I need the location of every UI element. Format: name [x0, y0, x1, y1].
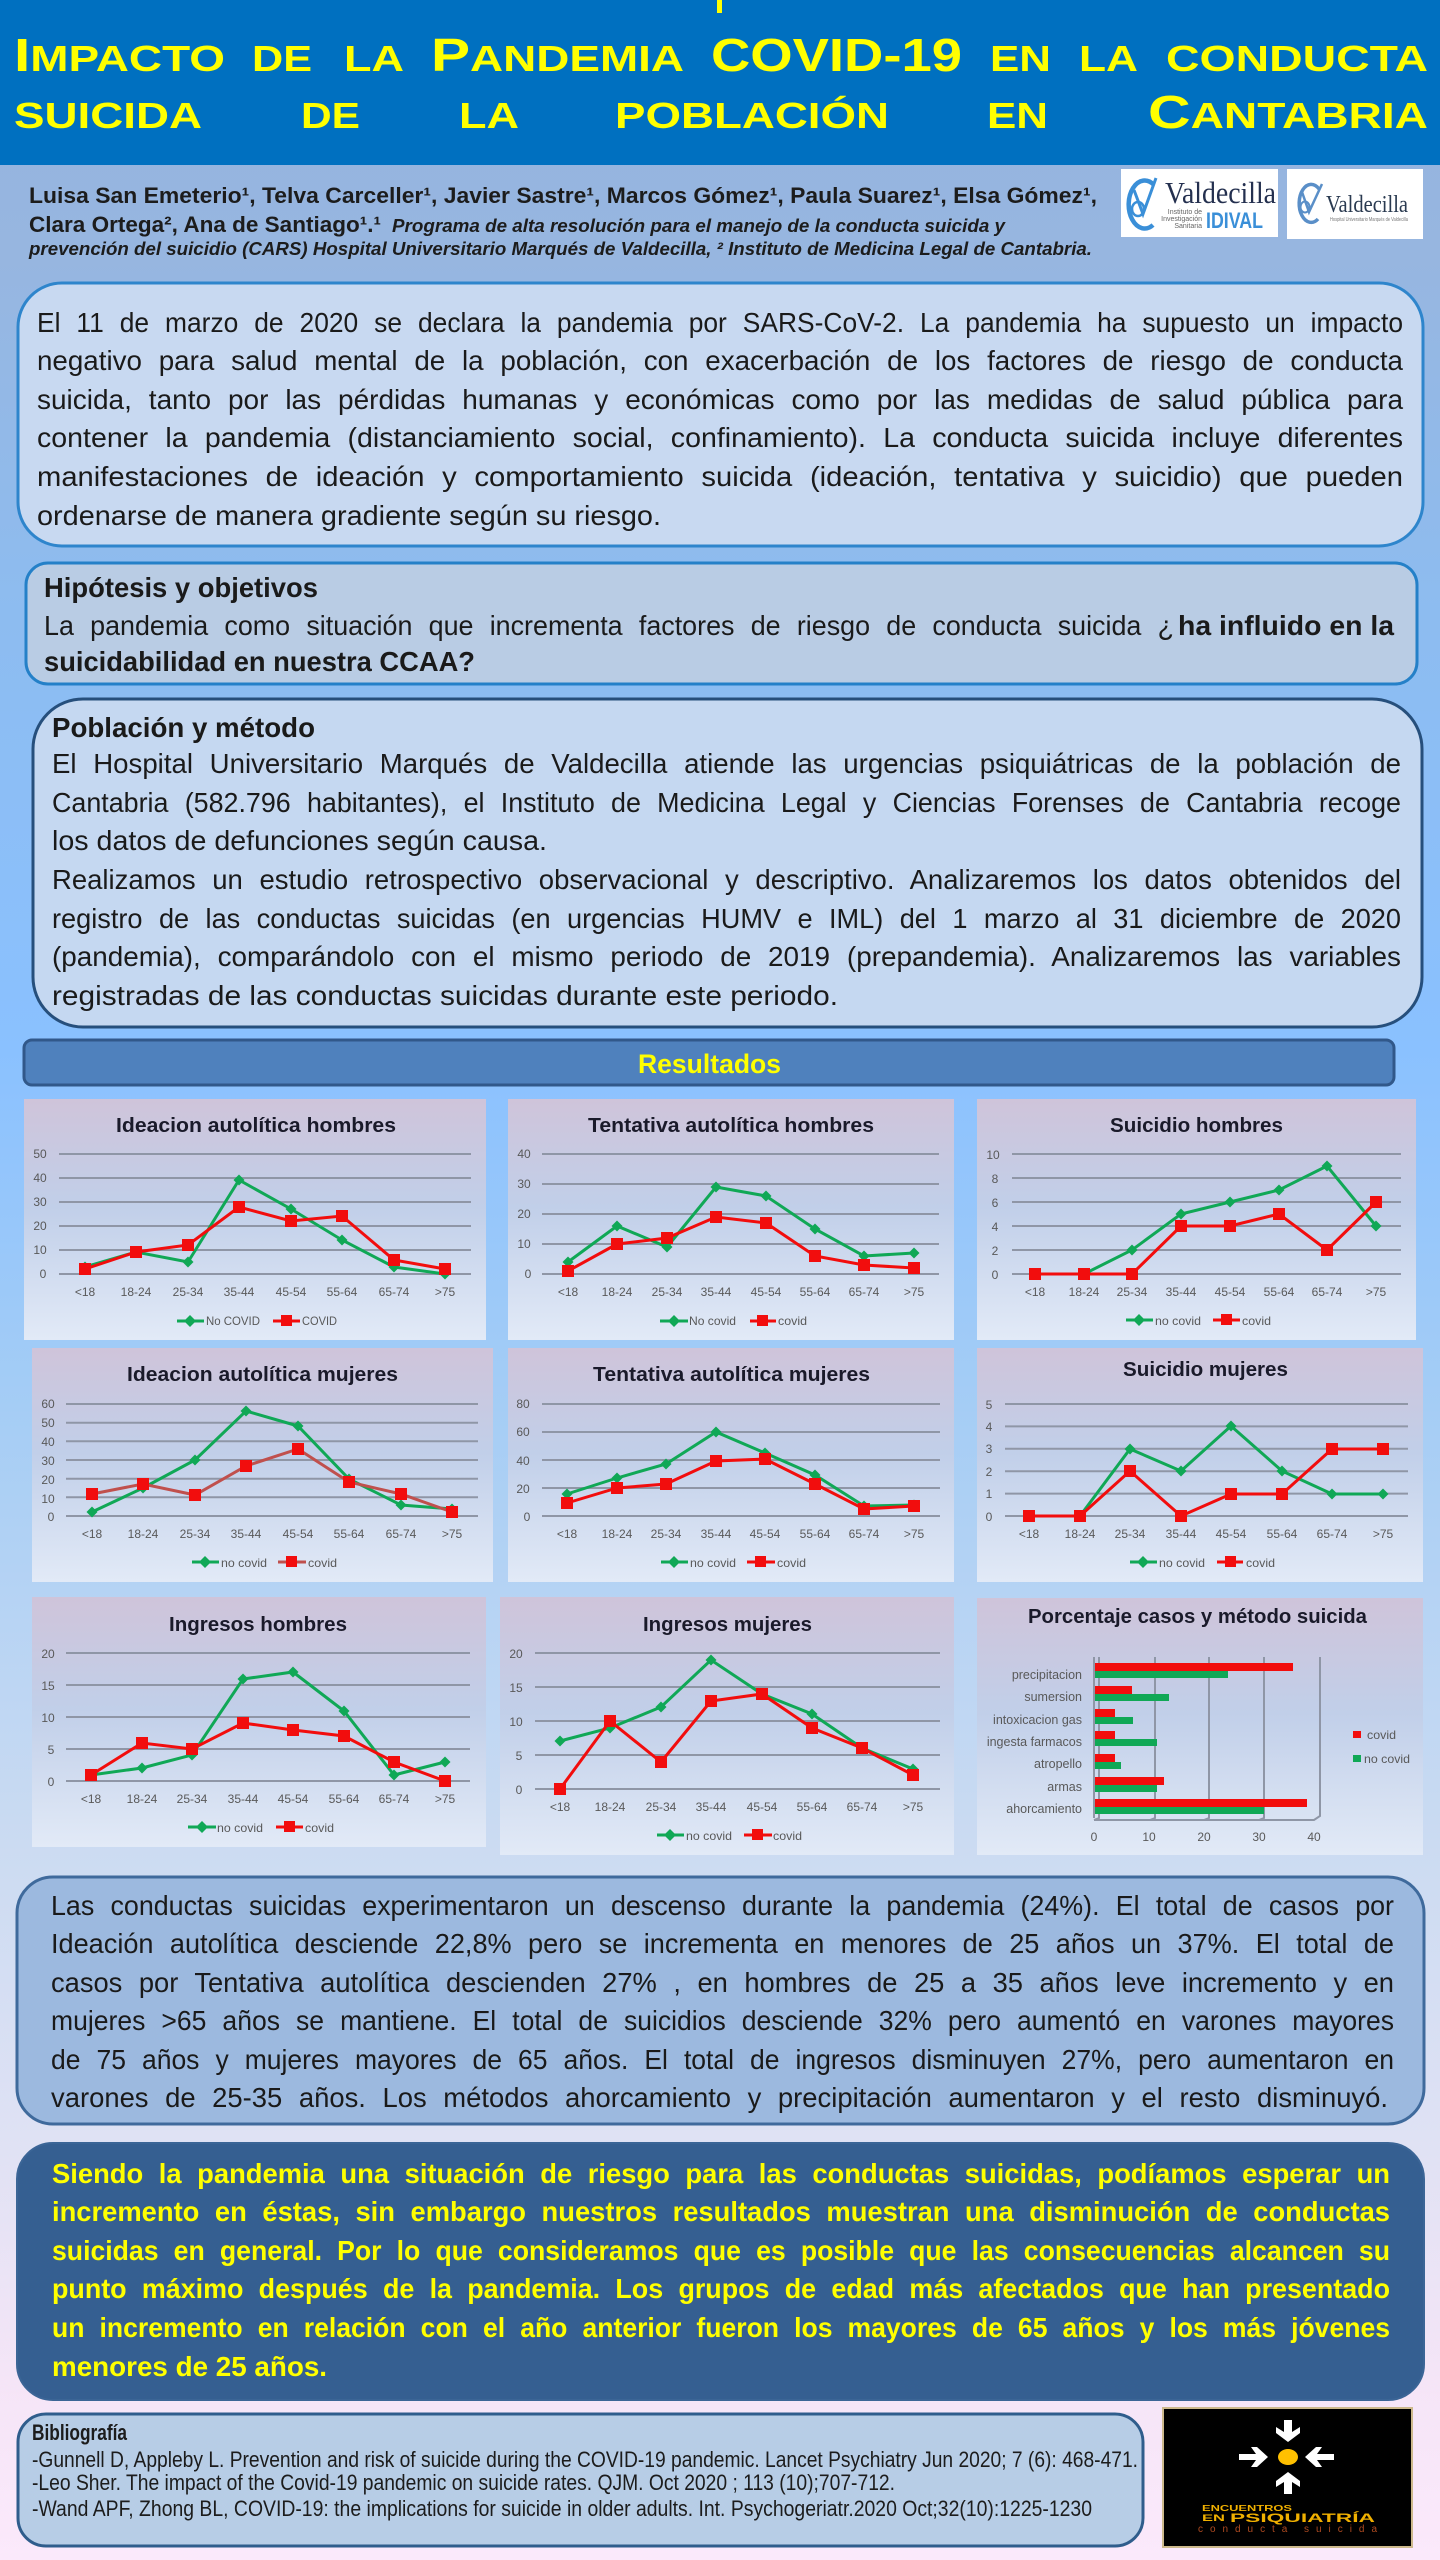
y axis labels — [516, 1397, 531, 1524]
legend — [1353, 1728, 1410, 1766]
x axis labels — [1025, 1285, 1387, 1299]
chart title: Ideacion autolítica mujeres — [127, 1364, 398, 1386]
panel: conclusion — [17, 2143, 1424, 2400]
category labels: sumersion — [1024, 1690, 1082, 1704]
results text: de 75 años y mujeres mayores de 65 años. El total de ingresos disminuyen 27%, pero aumentaron en — [51, 2044, 1394, 2075]
y axis labels: 3 — [986, 1442, 993, 1456]
references: -Leo Sher. The impact of the Covid-19 pandemic on suicide rates. QJM. Oct 2020 ; 113 (10);707-712. — [32, 2470, 895, 2495]
title: DE — [252, 38, 312, 79]
references — [32, 2447, 1138, 2521]
y axis labels: 30 — [517, 1177, 531, 1191]
results text: casos por Tentativa autolítica descienden 27% , en hombres de 25 a 35 años leve incremento y en — [51, 1967, 1394, 1998]
x axis labels: 45-54 — [751, 1285, 782, 1299]
hypothesis text — [44, 610, 1395, 677]
category labels: precipitacion — [1012, 1668, 1082, 1682]
y axis labels: 20 — [516, 1482, 530, 1496]
y axis labels: 2 — [986, 1465, 993, 1479]
legend — [1126, 1314, 1271, 1328]
y axis labels: 10 — [517, 1237, 531, 1251]
value axis labels: 10 — [1142, 1830, 1156, 1844]
conclusion text: incremento en éstas, sin embargo nuestros resultados muestran una disminución de conductas — [52, 2196, 1390, 2227]
title: CONDUCTA — [1166, 38, 1428, 79]
x axis labels: >75 — [903, 1800, 924, 1814]
introduction text — [37, 307, 1404, 531]
logo text — [1198, 2504, 1377, 2535]
y axis labels — [41, 1647, 55, 1789]
x axis labels: 45-54 — [1216, 1527, 1247, 1541]
series: covid — [568, 1217, 914, 1271]
logo: Valdecilla IDIVAL: IDIVAL — [1206, 208, 1263, 233]
method text: registro de las conductas suicidas (en urgencias HUMV e IML) del 1 marzo al 31 diciembre de 2020 — [52, 903, 1401, 934]
title — [14, 29, 1428, 138]
resultados banner — [24, 1040, 1394, 1085]
x axis labels: 35-44 — [224, 1285, 255, 1299]
x axis labels: 18-24 — [121, 1285, 152, 1299]
y axis labels: 60 — [516, 1425, 530, 1439]
title: SUICIDA — [14, 95, 202, 136]
legend: No covid — [689, 1314, 736, 1328]
y axis labels: 20 — [517, 1207, 531, 1221]
x axis labels: 45-54 — [747, 1800, 778, 1814]
chart: Suicidio mujeres — [977, 1348, 1423, 1582]
x axis labels: <18 — [557, 1527, 578, 1541]
authors and affiliations — [28, 183, 1097, 259]
x axis labels: 25-34 — [652, 1285, 683, 1299]
x axis labels: >75 — [1373, 1527, 1394, 1541]
title: C ANTABRIA — [1148, 86, 1428, 138]
method text: El Hospital Universitario Marqués de Valdecilla atiende las urgencias psiquiátricas de la población de — [52, 748, 1401, 779]
x axis labels: 65-74 — [1317, 1527, 1348, 1541]
x axis labels: 18-24 — [127, 1792, 158, 1806]
y axis labels: 6 — [992, 1196, 999, 1210]
series: no covid — [91, 1672, 445, 1775]
y axis labels: 15 — [509, 1681, 523, 1695]
y axis labels: 5 — [48, 1743, 55, 1757]
legend: covid — [777, 1556, 806, 1570]
y axis labels — [41, 1397, 55, 1524]
x axis labels: <18 — [550, 1800, 571, 1814]
title: EN — [990, 38, 1051, 79]
y axis labels: 20 — [509, 1647, 523, 1661]
x axis labels: 55-64 — [797, 1800, 828, 1814]
legend: no covid — [1364, 1752, 1410, 1766]
legend: covid — [773, 1829, 802, 1843]
x axis labels: >75 — [435, 1792, 456, 1806]
title: LA — [1079, 38, 1138, 79]
method text: los datos de defunciones según causa. — [52, 825, 547, 856]
category labels: ahorcamiento — [1006, 1802, 1082, 1816]
method text — [52, 748, 1401, 1011]
x axis labels — [82, 1527, 463, 1541]
x axis labels: 45-54 — [750, 1527, 781, 1541]
conclusion text: menores de 25 años. — [52, 2351, 327, 2382]
authors and affiliations: Programa de alta resolución para el manejo de la conducta suicida y — [392, 216, 1006, 236]
y axis labels: 0 — [48, 1775, 55, 1789]
x axis labels: 45-54 — [1215, 1285, 1246, 1299]
legend — [1130, 1556, 1275, 1570]
legend: COVID — [302, 1314, 337, 1328]
x axis labels: 25-34 — [1117, 1285, 1148, 1299]
logo text: EN — [1202, 2513, 1225, 2523]
y axis labels: 10 — [41, 1711, 55, 1725]
panel: introduction — [18, 283, 1423, 546]
x axis labels — [558, 1285, 925, 1299]
value axis labels: 0 — [1091, 1830, 1098, 1844]
y axis labels — [517, 1147, 532, 1281]
x axis labels: 25-34 — [173, 1285, 204, 1299]
chart title: Porcentaje casos y método suicida — [1028, 1606, 1368, 1628]
y axis labels: 40 — [41, 1435, 55, 1449]
x axis labels: 55-64 — [1267, 1527, 1298, 1541]
y axis labels: 5 — [516, 1749, 523, 1763]
method text: Realizamos un estudio retrospectivo observacional y descriptivo. Analizaremos los datos obtenidos del — [52, 864, 1401, 895]
x axis labels: >75 — [904, 1285, 925, 1299]
x axis labels: 35-44 — [701, 1527, 732, 1541]
conclusion text — [52, 2158, 1390, 2382]
legend — [192, 1556, 337, 1570]
x axis labels: 18-24 — [602, 1527, 633, 1541]
authors and affiliations: prevención del suicidio (CARS) Hospital Universitario Marqués de Valdecilla, ² Instituto de Medicina Legal de Cantabria. — [28, 239, 1092, 259]
method text: (pandemia), comparándolo con el mismo periodo de 2019 (prepandemia). Analizaremos las variables — [52, 941, 1401, 972]
x axis labels: <18 — [1019, 1527, 1040, 1541]
x axis labels: 18-24 — [1065, 1527, 1096, 1541]
x axis labels: 65-74 — [849, 1285, 880, 1299]
value axis labels: 30 — [1252, 1830, 1266, 1844]
y axis labels: 30 — [33, 1195, 47, 1209]
x axis labels: >75 — [435, 1285, 456, 1299]
x axis labels: 55-64 — [800, 1285, 831, 1299]
chart: Ingresos mujeres — [500, 1597, 954, 1855]
legend: covid — [1246, 1556, 1275, 1570]
legend: no covid — [690, 1556, 736, 1570]
logo: Valdecilla hospital — [1287, 169, 1423, 239]
x axis labels: 35-44 — [1166, 1285, 1197, 1299]
x axis labels: 18-24 — [595, 1800, 626, 1814]
title: EN — [987, 95, 1048, 136]
series: covid — [1035, 1202, 1376, 1274]
y axis labels: 0 — [40, 1267, 47, 1281]
y axis labels: 40 — [517, 1147, 531, 1161]
introduction text: suicida, tanto por las pérdidas humanas y económicas como por las medidas de salud pública para — [37, 384, 1404, 415]
x axis labels: 65-74 — [849, 1527, 880, 1541]
y axis labels — [986, 1398, 993, 1524]
x axis labels: 35-44 — [231, 1527, 262, 1541]
y axis labels: 50 — [41, 1416, 55, 1430]
logo: Valdecilla IDIVAL: Investigación — [1161, 216, 1202, 223]
legend: no covid — [686, 1829, 732, 1843]
y axis labels: 20 — [41, 1647, 55, 1661]
y axis labels: 80 — [516, 1397, 530, 1411]
x axis labels: 65-74 — [847, 1800, 878, 1814]
series: covid — [92, 1449, 452, 1512]
x axis labels — [550, 1800, 924, 1814]
conclusion text: Siendo la pandemia una situación de riesgo para las conductas suicidas, podíamos esperar un — [52, 2158, 1390, 2189]
series: no covid — [560, 1660, 913, 1769]
series: covid — [560, 1694, 913, 1789]
series: no covid — [568, 1187, 914, 1262]
y axis labels: 10 — [41, 1492, 55, 1506]
x axis labels: 55-64 — [334, 1527, 365, 1541]
x axis labels: 35-44 — [701, 1285, 732, 1299]
logo: Valdecilla IDIVAL: Valdecilla — [1165, 175, 1276, 210]
resultados banner: Resultados — [638, 1049, 781, 1079]
introduction text: El 11 de marzo de 2020 se declara la pandemia por SARS-CoV-2. La pandemia ha supuesto un impacto — [37, 307, 1403, 338]
y axis labels: 40 — [33, 1171, 47, 1185]
chart title: Ideacion autolítica hombres — [116, 1115, 396, 1137]
chart title: Tentativa autolítica hombres — [588, 1115, 874, 1137]
chart: Ingresos hombres — [32, 1597, 486, 1847]
x axis labels — [557, 1527, 925, 1541]
x axis labels: >75 — [442, 1527, 463, 1541]
x axis labels: 65-74 — [386, 1527, 417, 1541]
results text — [51, 1890, 1394, 2113]
chart title: Suicidio mujeres — [1123, 1359, 1288, 1381]
logo: Valdecilla hospital: Hospital Universitario Marqués de Valdecilla — [1330, 217, 1408, 223]
category labels: ingesta farmacos — [987, 1735, 1082, 1749]
legend: no covid — [1159, 1556, 1205, 1570]
title: LA — [459, 95, 519, 136]
y axis labels: 0 — [992, 1268, 999, 1282]
series: no covid — [1035, 1166, 1376, 1274]
chart: Tentativa autolítica hombres — [508, 1099, 954, 1340]
x axis labels: 55-64 — [329, 1792, 360, 1806]
x axis labels: 55-64 — [1264, 1285, 1295, 1299]
category labels: armas — [1047, 1780, 1082, 1794]
series: covid — [1029, 1449, 1383, 1516]
series: no covid — [567, 1432, 914, 1506]
panel: bibliografía — [18, 2414, 1143, 2546]
chart title: Suicidio hombres — [1110, 1115, 1283, 1137]
legend: covid — [1242, 1314, 1271, 1328]
x axis labels: 18-24 — [1069, 1285, 1100, 1299]
introduction text: contener la pandemia (distanciamiento social, confinamiento). La conducta suicida incluye diferentes — [37, 422, 1403, 453]
logo text: PSIQUIATRÍA — [1230, 2510, 1376, 2525]
x axis labels: <18 — [82, 1527, 103, 1541]
panel: población y método — [33, 699, 1422, 1027]
panel: results summary — [17, 1877, 1424, 2124]
hypothesis text: ha influido en la — [1178, 610, 1395, 641]
y axis labels: 0 — [516, 1783, 523, 1797]
chart: Tentativa autolítica mujeres — [508, 1348, 954, 1582]
x axis labels: <18 — [558, 1285, 579, 1299]
x axis labels: 18-24 — [602, 1285, 633, 1299]
icon: converging arrows — [1239, 2420, 1334, 2494]
series: covid — [85, 1207, 445, 1269]
legend — [188, 1821, 334, 1835]
y axis labels: 10 — [986, 1148, 1000, 1162]
bars: covid — [1095, 1663, 1307, 1807]
x axis labels: 65-74 — [379, 1285, 410, 1299]
y axis labels: 0 — [48, 1510, 55, 1524]
y axis labels: 15 — [41, 1679, 55, 1693]
x axis labels: 55-64 — [327, 1285, 358, 1299]
value axis labels — [1091, 1830, 1321, 1844]
x axis labels: <18 — [1025, 1285, 1046, 1299]
x axis labels: >75 — [904, 1527, 925, 1541]
heading: población y método: Población y método — [52, 712, 315, 743]
x axis labels: 55-64 — [800, 1527, 831, 1541]
y axis labels: 4 — [986, 1420, 993, 1434]
logo: Valdecilla IDIVAL — [1121, 169, 1278, 237]
title: POBLACIÓN — [615, 94, 889, 136]
value axis labels: 40 — [1307, 1830, 1321, 1844]
chart: Ideacion autolítica hombres — [24, 1099, 486, 1340]
x axis labels: 65-74 — [1312, 1285, 1343, 1299]
title: IMPACTO — [14, 29, 225, 81]
legend: no covid — [221, 1556, 267, 1570]
x axis labels: <18 — [75, 1285, 96, 1299]
chart: Ideacion autolítica mujeres — [32, 1348, 493, 1582]
x axis labels: 25-34 — [177, 1792, 208, 1806]
conclusion text: suicidas en general. Por lo que consideramos que es posible que las consecuencias alcancen su — [52, 2235, 1390, 2266]
introduction text: negativo para salud mental de la población, con exacerbación de los factores de riesgo de conducta — [37, 345, 1404, 376]
x axis labels: 25-34 — [1115, 1527, 1146, 1541]
x axis labels: 65-74 — [379, 1792, 410, 1806]
y axis labels — [986, 1148, 1000, 1282]
y axis labels: 1 — [986, 1487, 993, 1501]
legend: no covid — [1155, 1314, 1201, 1328]
category labels — [987, 1668, 1082, 1816]
bars: no covid — [1095, 1671, 1264, 1814]
legend — [660, 1314, 807, 1328]
y axis labels: 20 — [33, 1219, 47, 1233]
y axis labels: 10 — [33, 1243, 47, 1257]
x axis labels: 45-54 — [276, 1285, 307, 1299]
x axis labels: >75 — [1366, 1285, 1387, 1299]
chart title: Tentativa autolítica mujeres — [593, 1364, 870, 1386]
x axis labels: 25-34 — [646, 1800, 677, 1814]
heading: bibliografía: Bibliografía — [32, 2420, 128, 2445]
conclusion text: punto máximo después de la pandemia. Los grupos de edad más afectados que han presentado — [52, 2273, 1390, 2304]
y axis labels — [33, 1147, 47, 1281]
y axis labels — [509, 1647, 523, 1797]
legend: covid — [305, 1821, 334, 1835]
series: no covid — [85, 1180, 445, 1274]
results text: Ideación autolítica desciende 22,8% pero se incrementa en menores de 25 años un 37%. El total de — [51, 1928, 1394, 1959]
category labels: atropello — [1034, 1757, 1082, 1771]
legend: covid — [308, 1556, 337, 1570]
series: covid — [91, 1723, 445, 1781]
x axis labels: 45-54 — [283, 1527, 314, 1541]
conclusion text: un incremento en relación con el año anterior fueron los mayores de 65 años y los más jóvenes — [52, 2312, 1390, 2343]
logo text: conducta suicida — [1198, 2524, 1377, 2535]
header band — [0, 0, 1440, 165]
y axis labels: 5 — [986, 1398, 993, 1412]
x axis labels: <18 — [81, 1792, 102, 1806]
x axis labels: 45-54 — [278, 1792, 309, 1806]
logo: Valdecilla IDIVAL: Sanitaria — [1174, 223, 1202, 230]
results text: varones de 25-35 años. Los métodos ahorcamiento y precipitación aumentaron y el resto disminuyó. — [51, 2082, 1388, 2113]
method text: Cantabria (582.796 habitantes), el Instituto de Medicina Legal y Ciencias Forenses de Cantabria recoge — [52, 787, 1401, 818]
y axis labels: 0 — [986, 1510, 993, 1524]
hypothesis text: La pandemia como situación que incrementa factores de riesgo de conducta suicida ¿ — [44, 610, 1174, 641]
y axis labels: 40 — [516, 1454, 530, 1468]
legend — [661, 1556, 806, 1570]
x axis labels: 25-34 — [651, 1527, 682, 1541]
y axis labels: 60 — [41, 1397, 55, 1411]
introduction text: ordenarse de manera gradiente según su riesgo. — [37, 500, 661, 531]
x axis labels — [81, 1792, 456, 1806]
y axis labels: 50 — [33, 1147, 47, 1161]
references: -Gunnell D, Appleby L. Prevention and risk of suicide during the COVID-19 pandemic. Lancet Psychiatry Jun 2020; 7 (6): 468-471. — [32, 2447, 1138, 2472]
chart title: Ingresos mujeres — [643, 1614, 812, 1636]
authors and affiliations: Luisa San Emeterio¹, Telva Carceller¹, Javier Sastre¹, Marcos Gómez¹, Paula Suarez¹, Elsa Gómez¹, — [29, 183, 1097, 208]
title: LA — [344, 38, 404, 79]
chart title: Ingresos hombres — [169, 1614, 347, 1636]
y axis labels: 0 — [524, 1510, 531, 1524]
legend: covid — [1367, 1728, 1396, 1742]
panel: hipótesis y objetivos — [26, 563, 1417, 684]
heading: hipótesis y objetivos: Hipótesis y objetivos — [44, 572, 318, 603]
y axis labels: 4 — [992, 1220, 999, 1234]
authors and affiliations: Clara Ortega², Ana de Santiago¹.¹ — [29, 212, 381, 237]
results text: Las conductas suicidas experimentaron un descenso durante la pandemia (24%). El total de casos por — [51, 1890, 1394, 1921]
legend — [657, 1829, 802, 1843]
x axis labels: 35-44 — [228, 1792, 259, 1806]
x axis labels: 35-44 — [696, 1800, 727, 1814]
introduction text: manifestaciones de ideación y comportamiento suicida (ideación, tentativa y suicidio) que pueden — [37, 461, 1403, 492]
legend — [177, 1314, 337, 1328]
logo: Encuentros en Psiquiatría — [1163, 2408, 1412, 2547]
title: DE — [301, 95, 360, 136]
hypothesis text: suicidabilidad en nuestra CCAA? — [44, 646, 475, 677]
y axis labels: 30 — [41, 1454, 55, 1468]
y axis labels: 10 — [509, 1715, 523, 1729]
chart: Porcentaje casos y método suicida — [977, 1598, 1423, 1855]
y axis labels: 8 — [992, 1172, 999, 1186]
value axis labels: 20 — [1197, 1830, 1211, 1844]
method text: registradas de las conductas suicidas durante este periodo. — [52, 980, 838, 1011]
y axis labels: 2 — [992, 1244, 999, 1258]
x axis labels: 25-34 — [180, 1527, 211, 1541]
x axis labels: 18-24 — [128, 1527, 159, 1541]
legend: covid — [778, 1314, 807, 1328]
legend: No COVID — [206, 1314, 260, 1328]
logo: Valdecilla hospital: Valdecilla — [1326, 192, 1408, 218]
results text: mujeres >65 años se mantiene. El total de suicidios desciende 32% pero aumentó en varones mayores — [51, 2005, 1394, 2036]
logo text: ENCUENTROS — [1202, 2504, 1293, 2513]
x axis labels — [75, 1285, 456, 1299]
x axis labels — [1019, 1527, 1394, 1541]
series: covid — [567, 1459, 914, 1509]
title: PANDEMIA — [431, 29, 684, 81]
y axis labels: 20 — [41, 1473, 55, 1487]
series: no covid — [92, 1411, 452, 1512]
chart: Suicidio hombres — [977, 1099, 1416, 1340]
logo: Valdecilla IDIVAL: Instituto de — [1168, 209, 1202, 216]
series: no covid — [1029, 1426, 1383, 1516]
x axis labels: 35-44 — [1166, 1527, 1197, 1541]
legend: no covid — [217, 1821, 263, 1835]
y axis labels: 0 — [525, 1267, 532, 1281]
references: -Wand APF, Zhong BL, COVID-19: the implications for suicide in older adults. Int. Psychogeriatr.2020 Oct;32(10):1225-1230 — [32, 2496, 1092, 2521]
category labels: intoxicacion gas — [993, 1713, 1082, 1727]
title: COVID-19 — [711, 29, 962, 81]
